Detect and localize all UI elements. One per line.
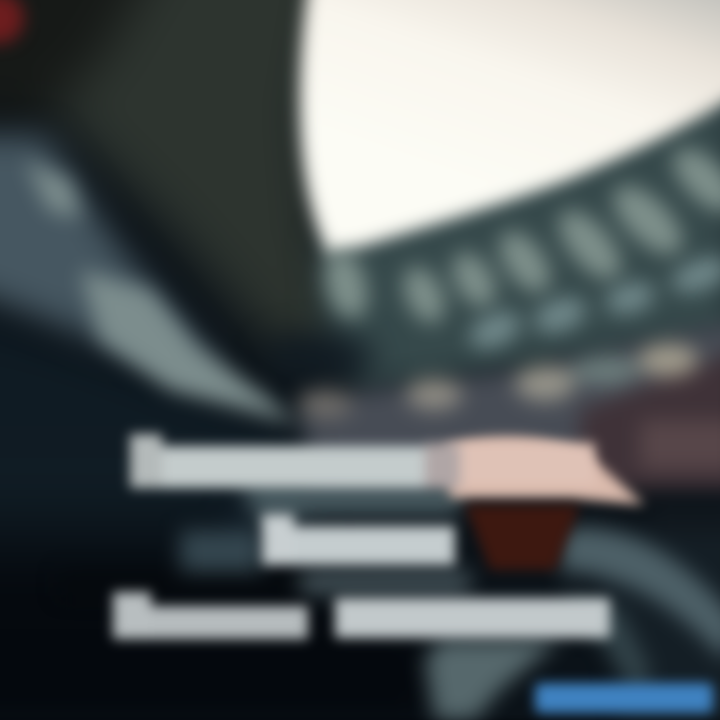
blue button (535, 683, 713, 713)
grey-blue cloth (0, 135, 230, 380)
sky (300, 0, 720, 256)
hand: peach (445, 437, 645, 505)
hand: brown shadow (465, 505, 580, 570)
headline line 2 (262, 514, 455, 565)
dark shadow under stand (265, 336, 375, 380)
dark lower-left area (0, 300, 430, 720)
dark stand (0, 0, 360, 370)
roof panels (317, 138, 720, 330)
red corner mark (0, 0, 24, 44)
mid-ground teal blur behind headline (60, 480, 470, 596)
lower roof panels (464, 251, 720, 356)
headline line 3 (113, 592, 610, 639)
crowd band (297, 320, 720, 490)
cloth highlights (25, 160, 300, 425)
stadium roof band (320, 70, 720, 395)
headline, rendered as blurred bars because its letters are illegible in the reference (113, 434, 610, 639)
headline line 1 (130, 434, 595, 488)
arm and sleeve (425, 505, 720, 720)
